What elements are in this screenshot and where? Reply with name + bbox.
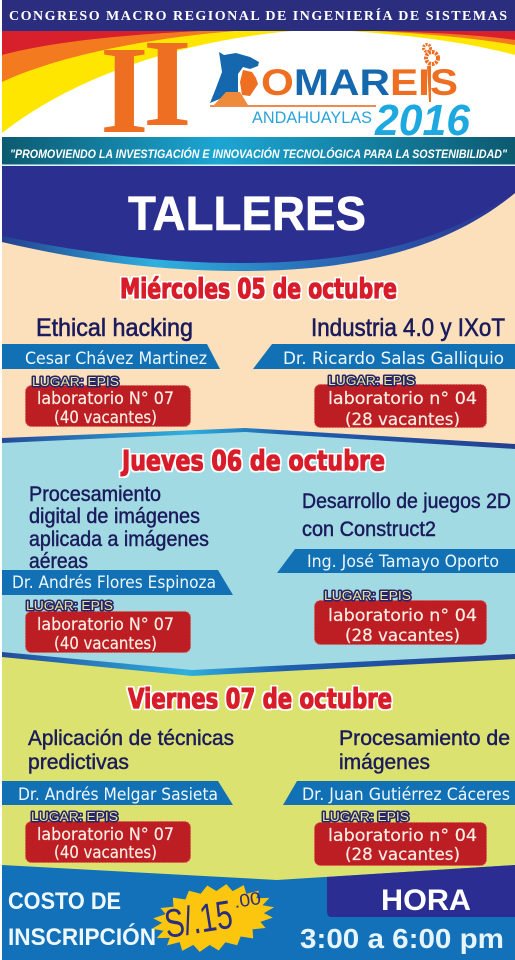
cost label: COSTO DE <box>8 888 121 915</box>
price starburst: S/.15 <box>162 893 236 947</box>
workshop: ethical hacking: Ethical hacking <box>36 314 193 342</box>
workshop: tecnicas predictivas: LUGAR: EPIS <box>31 809 118 824</box>
footer panel: INSCRIPCIÓN <box>8 923 156 951</box>
workshop: industria 4.0 <box>253 314 515 430</box>
workshop: ethical hacking: LUGAR: EPIS <box>32 374 119 389</box>
workshop: industria 4.0: laboratorio n° 04 <box>328 389 477 409</box>
workshop: procesamiento digital: Procesamiento <box>29 483 161 506</box>
workshop: procesamiento digital: (40 vacantes) <box>54 634 157 654</box>
icon: panther head <box>210 52 259 103</box>
panel: thursday <box>2 444 515 654</box>
talleres banner <box>2 166 515 271</box>
panel: friday <box>2 682 515 866</box>
workshop: tecnicas predictivas <box>2 727 234 863</box>
workshop: procesamiento digital: aplicada a imágenes <box>29 528 209 551</box>
logo COMAREIS <box>210 44 471 145</box>
icon: gears <box>424 44 438 64</box>
workshop: procesamiento digital: aéreas <box>29 550 88 573</box>
workshop: procesamiento digital: digital de imágenes <box>29 505 200 528</box>
price starburst <box>146 875 280 960</box>
workshop: procesamiento de imagenes: laboratorio n° 04 <box>328 826 477 846</box>
icon: warrior face <box>240 70 258 96</box>
workshop: juegos 2D: LUGAR: EPIS <box>324 588 411 603</box>
price starburst: .00 <box>232 888 262 912</box>
workshop: juegos 2D: (28 vacantes) <box>345 626 460 646</box>
separator: thursday to friday <box>2 652 515 676</box>
workshop: procesamiento de imagenes: Procesamiento de <box>339 727 510 750</box>
footer panel <box>2 865 515 960</box>
time: 3:00 a 6:00 pm <box>300 923 504 954</box>
roman numeral II <box>100 15 192 160</box>
workshop: procesamiento de imagenes <box>283 727 515 866</box>
workshop: procesamiento de imagenes: imágenes <box>339 751 430 774</box>
hora box <box>327 865 515 917</box>
workshop: ethical hacking: (40 vacantes) <box>54 408 157 428</box>
day heading: Jueves 06 de octubre <box>120 444 385 477</box>
day heading: Viernes 07 de octubre <box>128 682 392 715</box>
workshop: tecnicas predictivas: (40 vacantes) <box>54 843 157 863</box>
day heading: Miércoles 05 de octubre <box>120 272 397 305</box>
workshop: procesamiento digital: LUGAR: EPIS <box>26 598 113 613</box>
slogan band <box>2 137 515 166</box>
roman numeral II: I <box>143 15 192 153</box>
separator: wednesday to thursday <box>2 428 515 449</box>
year: 2016 <box>374 96 471 145</box>
workshop: tecnicas predictivas: predictivas <box>28 751 129 774</box>
header swooshes <box>2 31 515 133</box>
logo letters: OMAR EIS <box>261 62 458 103</box>
heading: TALLERES <box>128 188 366 241</box>
workshop: industria 4.0: Dr. Ricardo Salas Galliquio <box>283 349 504 369</box>
panel: wednesday <box>2 272 515 430</box>
icon: pyramid <box>214 92 248 105</box>
roman numeral II: I <box>100 22 149 160</box>
workshop: procesamiento digital <box>2 483 233 654</box>
hora label: HORA <box>381 884 471 917</box>
workshop: ethical hacking <box>2 314 220 428</box>
workshop: juegos 2D <box>277 490 515 646</box>
workshop: ethical hacking: laboratorio N° 07 <box>37 389 174 409</box>
place name: ANDAHUAYLAS <box>252 109 372 127</box>
workshop: tecnicas predictivas: Aplicación de técnicas <box>28 727 234 750</box>
workshop: procesamiento de imagenes: LUGAR: EPIS <box>322 809 409 824</box>
workshop: procesamiento digital: Dr. Andrés Flores Espinoza <box>12 573 216 593</box>
workshop: juegos 2D: Ing. José Tamayo Oporto <box>307 552 499 572</box>
workshop: industria 4.0: LUGAR: EPIS <box>328 373 415 388</box>
workshop: juegos 2D: con Construct2 <box>302 518 436 541</box>
workshop: procesamiento de imagenes: (28 vacantes) <box>345 845 460 865</box>
workshop: industria 4.0: (28 vacantes) <box>345 410 460 430</box>
workshop: ethical hacking: Cesar Chávez Martinez <box>25 349 207 369</box>
workshop: tecnicas predictivas: laboratorio N° 07 <box>37 825 174 845</box>
workshop: tecnicas predictivas: Dr. Andrés Melgar Sasieta <box>18 785 218 805</box>
workshop: juegos 2D: laboratorio n° 04 <box>328 606 477 626</box>
congress title: CONGRESO MACRO REGIONAL DE INGENIERÍA DE SISTEMAS <box>9 7 507 24</box>
workshop: procesamiento digital: laboratorio N° 07 <box>37 615 174 635</box>
top banner <box>2 0 515 31</box>
